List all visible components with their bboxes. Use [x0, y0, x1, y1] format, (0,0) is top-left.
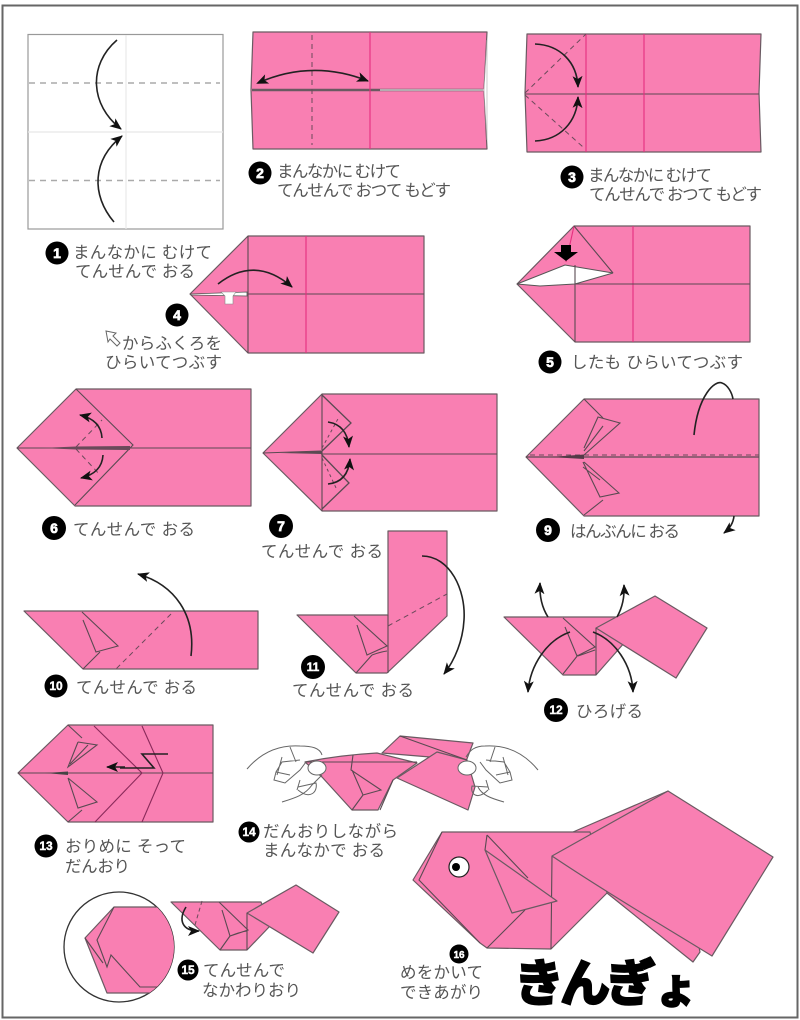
caption 5: [538, 350, 743, 374]
back tail: [573, 791, 700, 962]
step 12 panel: [504, 583, 707, 722]
caption 15: なかわりおり: [202, 981, 301, 1000]
caption 15: てんせんで: [203, 962, 285, 980]
step 3 panel: [525, 34, 762, 204]
caption 2: 2: [256, 165, 264, 181]
caption 1: 1: [53, 245, 61, 261]
diagram: tail flap folded upward: [297, 531, 464, 674]
caption 14: 14: [242, 825, 256, 839]
caption 14: [238, 822, 398, 860]
step 10 panel: [24, 574, 258, 698]
right hand: [458, 746, 538, 802]
caption 4: 4: [173, 307, 181, 323]
caption 9: 9: [544, 522, 552, 538]
caption 13: 13: [39, 839, 53, 853]
caption 14: だんおりしながら: [263, 822, 398, 841]
caption 11: てんせんで おる: [292, 681, 414, 700]
diagram: pink rectangle folded to centre: [251, 32, 487, 149]
caption 2: てんせんで おつて もどす: [277, 181, 451, 200]
caption 16: 16: [453, 950, 465, 961]
caption 11: 11: [307, 660, 320, 674]
caption 5: 5: [546, 354, 554, 370]
title: ょ: [655, 965, 697, 1012]
caption 4: ひらいてつぶす: [105, 354, 222, 372]
step 5 panel: [517, 226, 750, 374]
diagram: pocket opened on the left: [190, 236, 424, 353]
step 15 panel: [64, 885, 339, 1002]
detail circle: head close-up: [64, 892, 180, 1002]
diagram: half-folded body with dashed crease: [24, 574, 258, 669]
diagram: white square with fold lines: [28, 34, 223, 229]
step 14 panel: [238, 736, 538, 860]
icon: white arrow pointing into pocket: [221, 292, 236, 304]
caption 16: めをかいて: [400, 963, 483, 982]
icon: zigzag pleat arrow: [107, 754, 168, 768]
caption 9: はんぶんに おる: [570, 522, 680, 541]
diagram: inside reverse fold: [171, 885, 339, 953]
caption 10: [44, 674, 197, 698]
step 13 panel: [18, 725, 213, 876]
caption 10: 10: [49, 679, 63, 693]
caption 7: てんせんで おる: [261, 542, 383, 561]
diagram: both pockets flattened: [17, 389, 251, 506]
eye: [449, 857, 469, 877]
caption 7: 7: [277, 518, 285, 534]
step 7 panel: [261, 394, 497, 561]
caption 3: 3: [568, 169, 576, 185]
fin: [485, 850, 557, 913]
caption 1: まんなかに むけて: [73, 243, 212, 262]
caption 12: 12: [549, 703, 563, 717]
goldfish illustration: [413, 791, 773, 962]
caption 6: 6: [50, 520, 58, 536]
caption 15: 15: [181, 963, 195, 977]
caption 2: [248, 162, 451, 200]
caption 4: [105, 304, 222, 372]
caption 13: [34, 834, 186, 876]
body: [413, 832, 607, 949]
diagram: pocket squashed with arrow: [517, 226, 750, 342]
diagram: opening the body and tail: [504, 583, 707, 692]
icon: black down arrow: [554, 245, 578, 261]
caption 13: おりめに そって: [65, 837, 186, 856]
caption 11: [292, 655, 414, 700]
caption 3: てんせんで おつて もどす: [589, 185, 762, 204]
caption 4: からふくろを: [122, 334, 222, 353]
caption 16: [400, 944, 483, 1002]
caption 3: まんなかに むけて: [588, 166, 712, 185]
step 16 panel: finished goldfish: [400, 791, 773, 1012]
caption 6: [42, 516, 195, 540]
diagram: small triangle flaps folded: [263, 394, 497, 511]
left hand: [247, 746, 326, 802]
title: きんぎ: [514, 956, 656, 1012]
caption 12: ひろげる: [576, 702, 643, 721]
caption 1: てんせんで おる: [75, 262, 195, 281]
diagram: hands pinching model: [247, 736, 538, 810]
step 4 panel: [105, 236, 424, 372]
step 6 panel: [17, 389, 251, 540]
caption 9: [536, 518, 680, 542]
step 9 panel: [526, 383, 759, 542]
diagram: half fold with fins: [526, 383, 759, 533]
caption 15: [178, 960, 301, 1000]
caption 13: だんおり: [65, 857, 130, 876]
front tail: [552, 791, 773, 956]
step 1 panel: [28, 34, 223, 281]
caption 7: [261, 514, 383, 561]
caption 16: できあがり: [400, 983, 483, 1002]
step 2 panel: [248, 32, 487, 200]
caption 5: したも ひらいてつぶす: [571, 353, 743, 372]
caption 6: てんせんで おる: [73, 520, 195, 539]
caption 12: [544, 698, 643, 722]
caption 10: てんせんで おる: [76, 678, 197, 697]
caption 14: まんなかで おる: [263, 841, 385, 860]
caption 1: [46, 242, 212, 281]
diagram: rectangle with diagonal creases: [525, 34, 761, 152]
caption 2: まんなかに むけて: [277, 162, 401, 181]
diagram: pleat fold with creases: [18, 725, 213, 822]
step 11 panel: [292, 531, 464, 700]
caption 3: [560, 166, 762, 204]
